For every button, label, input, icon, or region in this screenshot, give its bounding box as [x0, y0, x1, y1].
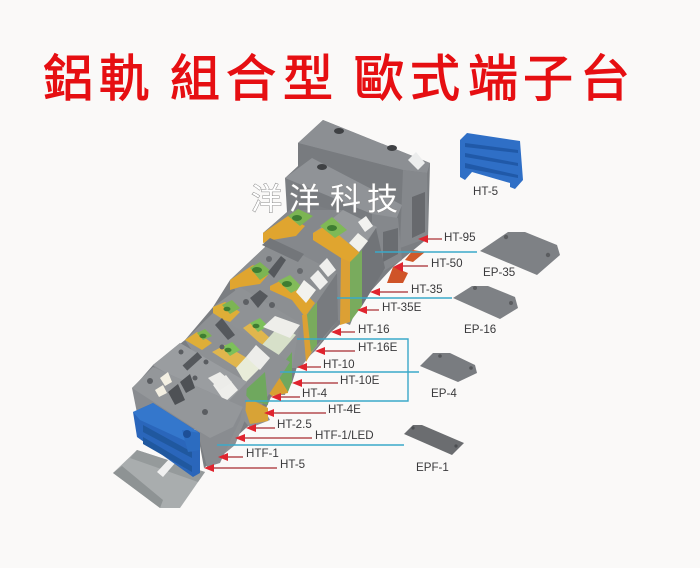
accessory: EP-35 end plate — [480, 232, 560, 279]
blue connector lines — [217, 252, 477, 445]
accessory: EP-4 end plate — [420, 353, 477, 400]
part labels — [246, 231, 476, 471]
terminal block: HT-10 and HT-10E — [213, 287, 300, 396]
stack body underlay — [133, 120, 430, 468]
terminal block: HT-35 and HT-35E — [263, 209, 385, 325]
title: 鋁軌組合型歐式端子台 — [43, 51, 630, 107]
blue end clamp on rail — [133, 403, 200, 477]
accessory: EP-35 end plate: EP-35 — [483, 266, 515, 279]
red arrows — [204, 235, 442, 472]
part labels: HT-2.5 — [277, 418, 312, 431]
part labels: HT-95 — [444, 231, 476, 244]
part labels: HTF-1 — [246, 447, 279, 460]
part labels: HT-16E — [358, 341, 398, 354]
part labels: HT-35 — [411, 283, 443, 296]
part labels: HT-50 — [431, 257, 463, 270]
terminal block: HT-50 — [285, 158, 425, 283]
accessory: EPF-1 end plate — [404, 425, 464, 474]
accessory: EP-4 end plate: EP-4 — [431, 387, 457, 400]
part labels: HTF-1/LED — [315, 429, 374, 442]
part labels: HT-10 — [323, 358, 355, 371]
terminal block: HT-5 front — [132, 367, 243, 467]
accessory: blue HT-5 clamp: HT-5 — [473, 185, 498, 198]
accessory: EPF-1 end plate: EPF-1 — [416, 461, 449, 474]
part labels: HT-35E — [382, 301, 422, 314]
part labels: HT-5 — [280, 458, 305, 471]
watermark: 洋洋科技 — [251, 182, 398, 217]
terminal block: HT-2.5 and HTF-1 — [153, 343, 247, 463]
part labels: HT-4E — [328, 403, 361, 416]
part labels: HT-10E — [340, 374, 380, 387]
accessory: EP-16 end plate — [453, 286, 518, 336]
din rail — [113, 450, 205, 508]
terminal block: HT-16 and HT-16E — [230, 238, 338, 368]
terminal block: HT-4 and HT-4E — [185, 313, 290, 428]
part labels: HT-16 — [358, 323, 390, 336]
terminal block: HT-95 — [298, 120, 430, 248]
accessory: blue HT-5 clamp — [460, 133, 523, 198]
accessory: EP-16 end plate: EP-16 — [464, 323, 496, 336]
part labels: HT-4 — [302, 387, 328, 400]
